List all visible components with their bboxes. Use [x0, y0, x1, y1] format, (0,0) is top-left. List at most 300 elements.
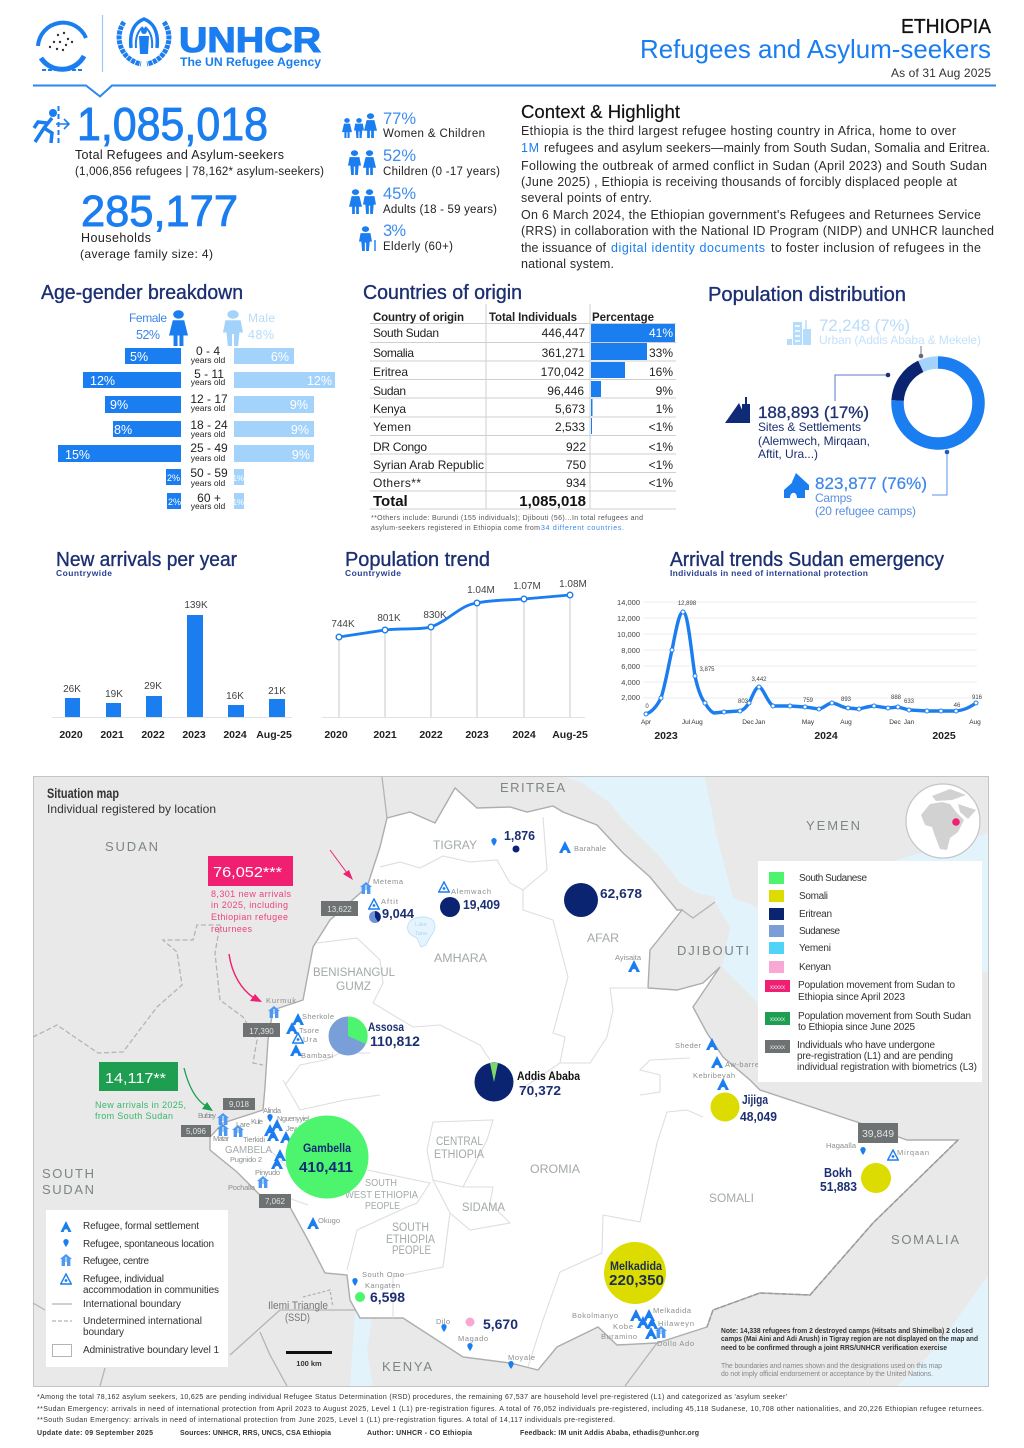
table: 41% [649, 326, 673, 340]
panel: arrival trends Sudan emergency [617, 549, 983, 742]
icon: camp [784, 473, 809, 498]
stat: women and children [342, 110, 485, 140]
age labels [190, 344, 228, 511]
region labels: SOUTH [365, 1177, 397, 1189]
total population label [75, 148, 324, 178]
table: 922 [566, 440, 586, 454]
location value labels: 220,350 [609, 1272, 664, 1289]
place labels: Tsore [299, 1026, 319, 1035]
female label: 52% [136, 328, 160, 342]
legend: nationalities and movements: Somali [799, 891, 828, 902]
country labels [42, 780, 959, 1374]
area line chart: Aug [840, 719, 852, 726]
body text: On 6 March 2024, the Ethiopian government's Refugees and Returnees Service [521, 208, 981, 222]
heading: Population distribution [708, 284, 906, 306]
title block: ETHIOPIA [901, 16, 992, 38]
body text: Following the outbreak of armed conflict in Sudan (April 2023) and South Sudan [521, 159, 987, 173]
location value labels: Bokh [824, 1165, 852, 1180]
body text: (June 2025) , Ethiopia is receiving thousands of forcibly displaced people at [521, 175, 958, 189]
bar chart [52, 600, 292, 741]
scale bar [286, 1351, 332, 1368]
place labels: Ura [303, 1035, 318, 1044]
area line chart: May [802, 719, 815, 726]
area line chart: 888 [891, 695, 902, 701]
map note: The boundaries and names shown and the designations used on this map [721, 1363, 942, 1370]
country labels: YEMEN [806, 818, 860, 833]
male label [248, 311, 275, 342]
line chart: 1.04M [467, 585, 495, 596]
legend: map symbols: Refugee, centre [83, 1256, 149, 1267]
donut chart [898, 362, 979, 444]
region labels: GAMBELA [225, 1144, 272, 1156]
panel: context and highlight [521, 101, 994, 271]
households label: (average family size: 4) [80, 247, 213, 261]
stat: children: Children (0 -17 years) [383, 166, 500, 178]
legend: nationalities and movements: Yemeni [799, 943, 831, 954]
header [33, 15, 996, 96]
map title [47, 785, 216, 816]
region labels: Ilemi Triangle [268, 1300, 328, 1312]
heading: Age-gender breakdown [41, 282, 243, 304]
table: 1,085,018 [519, 493, 586, 510]
legend: map symbols: Refugee, spontaneous location [83, 1239, 214, 1250]
admin level 1 boundaries [270, 817, 703, 1367]
footnotes: **South Sudan Emergency: arrivals in need of international protection from June 2025, Level 1 (L1) pre-registration figures. A total of 14,117 individuals pre-registered. [37, 1417, 615, 1424]
footnotes: *Among the total 78,162 asylum seekers, 10,625 are pending individual Refugee Status Determination (RSD) procedures, the remaining 67,537 are household level pre-registered (L1) and categorized as 'asylum seeker' [37, 1394, 787, 1401]
location icons [217, 838, 898, 1369]
panel: population distribution [708, 284, 981, 518]
total population figure: 1,085,018 [77, 98, 268, 150]
table: 5,673 [555, 402, 585, 416]
line chart: 2022 [419, 729, 443, 741]
legend: map symbols: Refugee, formal settlement [83, 1221, 199, 1232]
location value labels: 410,411 [299, 1159, 353, 1176]
table: 934 [566, 476, 586, 490]
country labels: KENYA [382, 1359, 432, 1374]
table: Kenya [373, 402, 406, 416]
bar chart: 29K [144, 681, 162, 692]
map note: camps (Mai Aini and Adi Arush) in Tigray region are not displayed on the map and [721, 1336, 978, 1343]
table: South Sudan [373, 326, 439, 340]
area line chart: 3,875 [699, 667, 715, 673]
bar chart: 2023 [182, 729, 206, 741]
location value labels: 70,372 [519, 1083, 561, 1098]
percentage bars [591, 324, 675, 434]
Assosa pie [328, 1016, 368, 1056]
table: <1% [649, 440, 673, 454]
area line chart: Aug [691, 719, 703, 726]
region labels: SOUTH [392, 1222, 429, 1234]
age labels: years old [191, 501, 226, 511]
location value labels: 62,678 [600, 886, 642, 901]
region labels: PEOPLE [365, 1200, 400, 1212]
place labels: Burbiey [198, 1111, 216, 1120]
map note: do not imply official endorsement or acceptance by the United Nations. [721, 1371, 933, 1378]
footnotes: Author: UNHCR - CO Ethiopia [367, 1430, 472, 1437]
households figure: 285,177 [81, 187, 238, 236]
bar chart: 16K [226, 691, 244, 702]
male label: 48% [248, 328, 274, 342]
table: 96,446 [547, 384, 584, 398]
camps callout: (20 refugee camps) [815, 504, 916, 518]
icon: city [787, 320, 811, 345]
female bars: 2% [168, 497, 181, 507]
body text: digital identity documents [611, 241, 765, 255]
sea areas [350, 777, 988, 1386]
total population label: Total Refugees and Asylum-seekers [75, 148, 284, 162]
female bars: 8% [114, 423, 132, 437]
legend: nationalities and movements: Ethiopia since April 2023 [798, 992, 905, 1003]
legend: nationalities and movements: xxxxx [770, 1017, 785, 1023]
female bars [58, 348, 181, 509]
area line chart: Jan [755, 719, 766, 726]
key figures [34, 98, 324, 261]
age labels: years old [191, 478, 226, 488]
table: Others** [373, 476, 421, 490]
map title: Individual registered by location [47, 802, 216, 816]
Ethiopia land [210, 788, 958, 1370]
place labels: Sheder [675, 1041, 702, 1050]
heading: Population trend [345, 549, 490, 571]
place labels: Bambasi [301, 1051, 333, 1060]
country labels: ERITREA [500, 780, 565, 795]
footnotes: Feedback: IM unit Addis Ababa, ethadis@unhcr.org [520, 1430, 699, 1437]
footnotes: Sources: UNHCR, RRS, UNCS, CSA Ethiopia [180, 1430, 331, 1437]
area line chart: 12,000 [617, 614, 640, 623]
female label: Female [129, 311, 167, 325]
table: 170,042 [541, 365, 584, 379]
location value labels: 9,044 [382, 906, 415, 921]
place labels: Pinyudo [255, 1168, 280, 1177]
place labels: Dilo [436, 1317, 450, 1326]
area line chart: 12,898 [678, 601, 697, 607]
location value labels: 51,883 [820, 1179, 857, 1194]
area line chart: 0 [645, 704, 649, 710]
bar chart: 2020 [59, 729, 83, 741]
male bars: 1% [232, 474, 244, 483]
map note [721, 1328, 978, 1378]
line chart: 830K [423, 610, 447, 621]
region labels [225, 840, 754, 1324]
callout: Sudan arrivals: in 2025, including [211, 900, 288, 910]
legend: nationalities and movements: Population movement from Sudan to [798, 980, 955, 991]
legend: map symbols: boundary [83, 1327, 124, 1338]
place labels: Ayisaita [615, 953, 642, 962]
legend: nationalities and movements: Individuals who have undergone [797, 1040, 935, 1051]
arrow: Sudan to Metema [330, 850, 353, 880]
line chart: Aug-25 [552, 729, 588, 741]
location value labels: Jijiga [742, 1092, 769, 1107]
place labels: Lare [236, 1120, 250, 1129]
legend: map symbols: International boundary [83, 1299, 181, 1310]
region labels: SOMALI [709, 1193, 754, 1205]
arrow: South Sudan to Gambela [184, 1068, 213, 1111]
callout: South Sudan arrivals: 14,117** [105, 1070, 166, 1087]
location value labels [299, 828, 857, 1332]
place labels: Jewi [286, 1124, 300, 1133]
border crossing figures: 9,018 [229, 1100, 250, 1109]
stat: children: 52% [383, 147, 416, 165]
age labels: years old [191, 453, 226, 463]
table: 1% [656, 402, 673, 416]
stat: women and children: 77% [383, 110, 416, 128]
age labels: 60 + [197, 491, 221, 505]
place labels: Moyale [508, 1353, 535, 1362]
place labels: Kebribeyah [693, 1071, 735, 1080]
area line chart: 2024 [814, 730, 838, 742]
callout: Sudan arrivals: returnees [211, 924, 252, 934]
scale bar: 100 km [296, 1359, 322, 1368]
Lake Tana: Lake [415, 922, 427, 928]
place labels: Kobe [613, 1322, 633, 1331]
map background [34, 776, 988, 1386]
region labels: TIGRAY [433, 840, 477, 852]
sites and settlements callout: (Alemwech, Mirqaan, [758, 434, 870, 448]
title block [640, 16, 992, 80]
location value labels: Gambella [303, 1141, 351, 1155]
age labels: 50 - 59 [190, 466, 228, 480]
logo wordmark: The UN Refugee Agency [180, 55, 321, 69]
legend: nationalities and movements: Population movement from South Sudan [798, 1011, 971, 1022]
map note: need to be confirmed through a joint RRS/UNHCR verification exercise [721, 1345, 947, 1352]
place labels: Kangaten [365, 1281, 400, 1290]
legend: nationalities and movements: Kenyan [799, 962, 831, 973]
total population label: (1,006,856 refugees | 78,162* asylum-seekers) [75, 166, 324, 178]
bar chart: 2021 [100, 729, 124, 741]
Addis Ababa pie [474, 1062, 514, 1102]
legend: map symbols [46, 1210, 228, 1367]
age labels: 25 - 49 [190, 441, 228, 455]
region labels: CENTRAL [436, 1136, 484, 1148]
male label: Male [248, 311, 275, 325]
proportional pie symbols [286, 846, 891, 1326]
heading: Countries of origin [363, 282, 522, 304]
place labels: Buramino [601, 1332, 637, 1341]
region labels: PEOPLE [392, 1245, 431, 1257]
area line chart: Jul [682, 719, 691, 726]
logo wordmark: UNHCR [179, 21, 321, 60]
panel: new arrivals per year [52, 549, 292, 741]
place labels: Matar [213, 1134, 230, 1143]
footnotes: **Sudan Emergency: arrivals in need of international protection from April 2023 to August 2025, Level 1 (L1) pre-registration figures. A total of 76,052 individuals pre-registered, including 45,118 Sudanese, 10,708 other nationalities, and 20,226 Ethiopian refugee returnees. [37, 1406, 984, 1413]
footnotes: Update date: 09 September 2025 [37, 1430, 153, 1437]
sites and settlements callout: Aftit, Ura...) [758, 447, 818, 461]
age labels: 18 - 24 [190, 418, 228, 432]
line chart: 1.07M [513, 581, 541, 592]
table footnote: asylum-seekers registered in Ethiopia come from [371, 525, 540, 532]
location value labels: 6,598 [370, 1289, 405, 1305]
inset globe [906, 784, 980, 858]
table footnote: **Others include: Burundi (155 individuals); Djibouti (56)...In total refugees and [371, 515, 643, 522]
place labels: Melkadida [653, 1306, 692, 1315]
legend: nationalities and movements: xxxxx [770, 1045, 785, 1051]
region labels: AFAR [587, 933, 619, 945]
area line chart: Jan [904, 719, 915, 726]
country boundaries outside Ethiopia [33, 777, 715, 1386]
legend: nationalities and movements: Eritrean [799, 909, 832, 920]
line chart: 2020 [324, 729, 348, 741]
sites and settlements callout: 188,893 (17%) [758, 403, 869, 422]
legend: map symbols: Administrative boundary level 1 [83, 1345, 219, 1356]
area line chart: Apr [641, 719, 652, 726]
legend: nationalities and movements: xxxxx [770, 985, 785, 991]
border crossing figures [181, 901, 898, 1208]
location value labels: 19,409 [463, 897, 500, 912]
heading: New arrivals per year [56, 549, 237, 571]
location value labels: 1,876 [504, 828, 535, 843]
border crossing figures: 5,096 [186, 1127, 207, 1136]
place labels: Alemwach [451, 887, 491, 896]
table: 750 [566, 458, 586, 472]
country labels: DJIBOUTI [677, 943, 749, 958]
place labels: Pugnido 2 [230, 1155, 262, 1164]
bar chart: 19K [105, 689, 123, 700]
female label [129, 311, 167, 342]
bar chart: 139K [184, 600, 208, 611]
table: Somalia [373, 346, 414, 360]
sites and settlements callout: Sites & Settlements [758, 420, 861, 434]
area line chart: 46 [954, 703, 961, 709]
age labels: 12 - 17 [190, 392, 228, 406]
area line chart: Dec [742, 719, 755, 726]
demographic stats [342, 110, 500, 253]
households label: Households [81, 231, 151, 245]
area line chart: 803 [738, 699, 749, 705]
panel: countries of origin [363, 282, 676, 532]
footnotes [37, 1394, 984, 1437]
male bars: 1% [232, 498, 244, 507]
area line chart: 893 [841, 697, 852, 703]
line chart: 2021 [373, 729, 397, 741]
panel: situation map [33, 776, 988, 1386]
table: Syrian Arab Republic [373, 458, 484, 472]
body text: 1M [521, 141, 539, 155]
body text: to foster inclusion of refugees in the [771, 241, 981, 255]
region labels: AMHARA [434, 953, 487, 965]
border crossing figures: 17,390 [249, 1027, 274, 1036]
line chart: 744K [331, 619, 355, 630]
country labels: SOUTH [42, 1166, 94, 1181]
female bars: 2% [167, 473, 180, 483]
area line chart: 10,000 [617, 630, 640, 639]
place labels: South Omo [362, 1270, 404, 1279]
table: <1% [649, 420, 673, 434]
table: 361,271 [542, 346, 585, 360]
body text: national system. [521, 257, 614, 271]
area line chart: 759 [803, 698, 814, 704]
area line chart: 2023 [654, 730, 678, 742]
heading: Arrival trends Sudan emergency [670, 549, 944, 571]
location value labels: 110,812 [370, 1033, 420, 1049]
location value labels: Addis Ababa [517, 1069, 580, 1083]
area line chart: 14,000 [617, 598, 640, 607]
body text: several points of entry. [521, 191, 652, 205]
body text: refugees and asylum seekers—mainly from South Sudan, Somalia and Eritrea. [544, 141, 990, 155]
table: Total [373, 493, 408, 510]
logo: Ethiopia RRS emblem [38, 23, 86, 70]
icon: female [169, 310, 188, 346]
female bars: 15% [65, 448, 90, 462]
undetermined Somalia boundary [707, 1140, 958, 1327]
camps callout: Camps [815, 491, 852, 505]
icon: male [223, 310, 243, 346]
bar chart: Aug-25 [256, 729, 292, 741]
country labels: SOMALIA [891, 1232, 959, 1247]
country labels: SUDAN [105, 839, 158, 854]
female bars: 9% [110, 398, 128, 412]
stat: women and children: Women & Children [383, 128, 485, 140]
stat: children [348, 147, 500, 178]
area line chart: Aug [969, 719, 981, 726]
place labels: Pochalla [228, 1183, 256, 1192]
age labels: years old [191, 403, 226, 413]
region labels: WEST ETHIOPIA [345, 1189, 418, 1201]
bar chart: 2022 [141, 729, 165, 741]
title block: As of 31 Aug 2025 [891, 66, 991, 80]
location value labels: Melkadida [610, 1259, 662, 1273]
callout: Sudan arrivals: Ethiopian refugee [211, 912, 288, 922]
female bars: 12% [90, 374, 115, 388]
male bars: 6% [271, 350, 289, 364]
region labels: ETHIOPIA [434, 1149, 484, 1161]
age labels: years old [191, 377, 226, 387]
map note: Note: 14,338 refugees from 2 destroyed camps (Hitsats and Shimelba) 2 closed [721, 1328, 973, 1335]
male bars: 9% [292, 448, 310, 462]
place labels: Aftit [381, 897, 399, 906]
line chart: 1.08M [559, 579, 587, 590]
table: 446,447 [542, 326, 585, 340]
location value labels: Assosa [368, 1020, 404, 1034]
callout: South Sudan arrivals [95, 1062, 186, 1121]
table: Yemen [373, 420, 411, 434]
table footnote [371, 515, 643, 532]
place labels: Alinda [263, 1106, 282, 1115]
subheading: Individuals in need of international protection [670, 568, 868, 578]
location value labels: 48,049 [740, 1109, 777, 1124]
place labels: Kule [251, 1117, 263, 1126]
callout: Sudan arrivals: 76,052*** [213, 864, 282, 881]
area line chart: 2,000 [621, 693, 640, 702]
area line chart [617, 598, 983, 742]
households label [80, 231, 213, 261]
table: 33% [649, 346, 673, 360]
legend: map symbols: Undetermined international [83, 1316, 202, 1327]
Lake Tana: Tana [415, 931, 428, 937]
place labels: Dollo Ado [657, 1339, 694, 1348]
area line chart: 916 [972, 695, 983, 701]
map title: Situation map [47, 785, 119, 801]
heading: Context & Highlight [521, 101, 680, 122]
line chart [322, 579, 588, 741]
area line chart: 6,000 [621, 662, 640, 671]
camps callout [784, 450, 949, 518]
place labels: Tierkidi [243, 1135, 265, 1144]
body text: Ethiopia is the third largest refugee hosting country in Africa, home to over [521, 124, 956, 138]
table: <1% [649, 458, 673, 472]
callout: South Sudan arrivals: New arrivals in 2025, [95, 1100, 186, 1110]
urban callout: Urban (Addis Ababa & Mekele) [819, 333, 981, 347]
callout: Sudan arrivals: 8,301 new arrivals [211, 889, 292, 899]
area line chart: 3,442 [751, 677, 767, 683]
urban callout [787, 316, 981, 358]
subheading: Countrywide [56, 568, 112, 578]
stat: elderly: Elderly (60+) [383, 241, 453, 253]
area line chart: 2025 [932, 730, 956, 742]
body text: the issuance of [521, 241, 607, 255]
table [370, 304, 676, 510]
title block: Refugees and Asylum-seekers [640, 34, 991, 64]
area line chart: 8,000 [621, 646, 640, 655]
